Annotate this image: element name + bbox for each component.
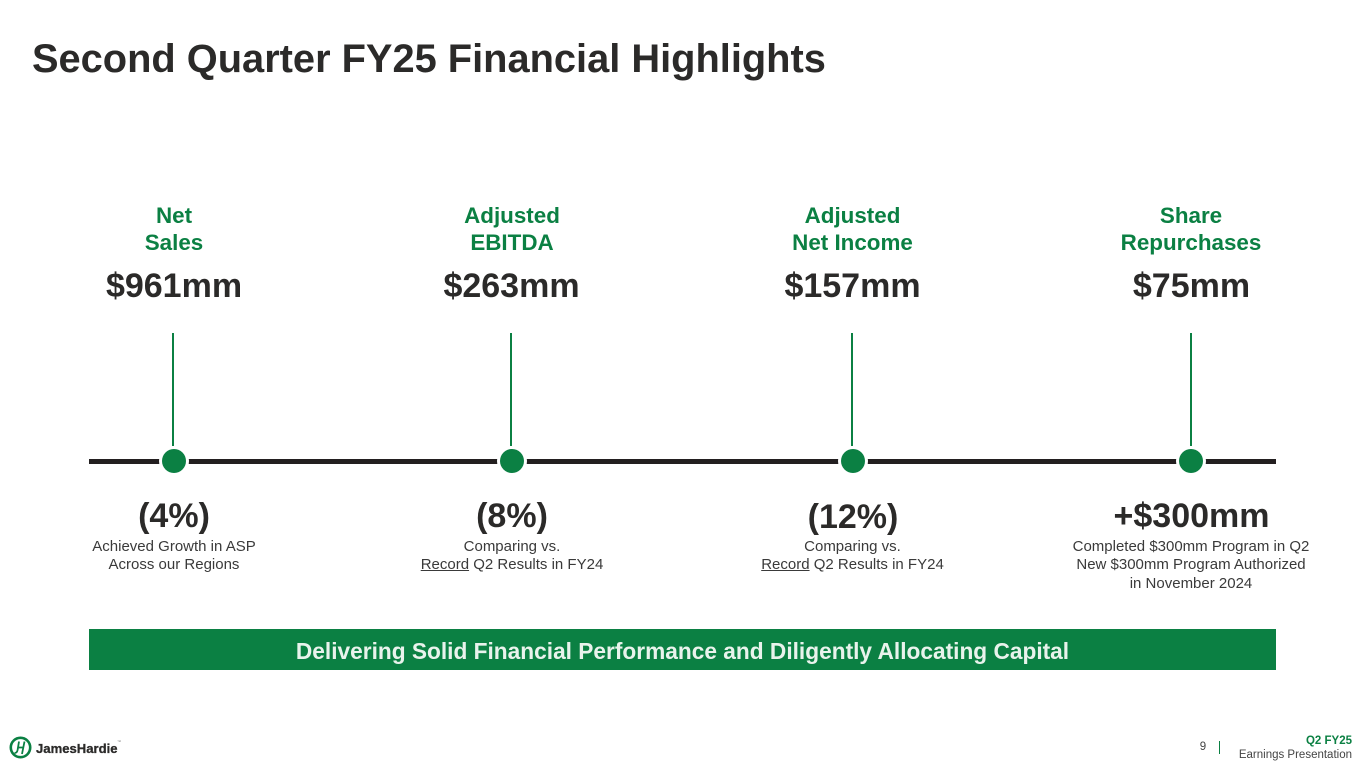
logo: JamesHardie <box>10 736 121 758</box>
change: share repurchases: +$300mm <box>1114 497 1269 535</box>
note: adjusted ebitda: Comparing vs. <box>464 538 560 554</box>
banner <box>89 629 1276 670</box>
note: adjusted ebitda: Record Q2 Results in FY24 <box>421 556 603 573</box>
footer label: Q2 FY25 <box>1306 735 1352 747</box>
icon: JH roundel <box>10 736 32 758</box>
note: share repurchases: New $300mm Program Authorized <box>1076 556 1306 573</box>
value: share repurchases: $75mm <box>1133 266 1250 304</box>
connector: net sales <box>172 333 174 446</box>
value: adjusted net income: $157mm <box>784 266 921 304</box>
heading: adjusted ebitda <box>464 203 560 255</box>
logo: JamesHardie: ™ <box>117 739 121 744</box>
heading: share repurchases: Repurchases <box>1121 230 1261 255</box>
connector: share repurchases <box>1190 333 1192 446</box>
connector: adjusted ebitda <box>510 333 512 446</box>
value: net sales: $961mm <box>106 266 242 304</box>
panel: net sales <box>92 203 256 573</box>
footer label: Earnings Presentation <box>1239 749 1352 761</box>
banner: Delivering Solid Financial Performance and Diligently Allocating Capital <box>296 638 1069 664</box>
note: share repurchases: in November 2024 <box>1130 574 1252 592</box>
note: adjusted ebitda <box>420 538 603 573</box>
timeline axis <box>89 458 1276 464</box>
panel: adjusted net income <box>761 203 944 573</box>
connector: adjusted net income <box>851 333 853 446</box>
footer divider <box>1219 741 1220 754</box>
note: adjusted net income <box>761 538 944 573</box>
note: adjusted net income: Record Q2 Results in FY24 <box>761 556 944 573</box>
heading: share repurchases: Share <box>1160 203 1222 228</box>
change: adjusted net income: (12%) <box>808 498 898 536</box>
heading: adjusted net income: Adjusted <box>805 203 900 228</box>
page number: 9 <box>1200 741 1206 753</box>
change: adjusted ebitda: (8%) <box>476 497 548 535</box>
heading: net sales: Sales <box>145 230 203 255</box>
marker: net sales <box>162 449 186 473</box>
change: net sales: (4%) <box>138 497 210 535</box>
note: net sales: Across our Regions <box>109 556 239 573</box>
heading: adjusted net income <box>792 203 913 255</box>
value: adjusted ebitda: $263mm <box>443 266 580 304</box>
note: share repurchases: Completed $300mm Program in Q2 <box>1073 538 1309 554</box>
heading: net sales: Net <box>156 203 192 228</box>
note: share repurchases <box>1073 538 1309 592</box>
note: net sales <box>92 538 256 573</box>
title: Second Quarter FY25 Financial Highlights <box>32 37 826 81</box>
marker: adjusted ebitda <box>500 449 524 473</box>
footer label <box>1239 735 1352 761</box>
marker: share repurchases <box>1179 449 1203 473</box>
panel: adjusted ebitda <box>420 203 603 573</box>
panel: share repurchases <box>1073 203 1309 592</box>
heading: share repurchases <box>1121 203 1261 255</box>
heading: adjusted net income: Net Income <box>792 230 913 255</box>
heading: net sales <box>145 203 203 255</box>
marker: adjusted net income <box>841 449 865 473</box>
note: adjusted net income: Comparing vs. <box>804 538 901 554</box>
heading: adjusted ebitda: EBITDA <box>470 230 554 255</box>
heading: adjusted ebitda: Adjusted <box>464 203 560 228</box>
note: net sales: Achieved Growth in ASP <box>92 538 256 554</box>
logo wordmark: JamesHardie <box>36 741 118 756</box>
